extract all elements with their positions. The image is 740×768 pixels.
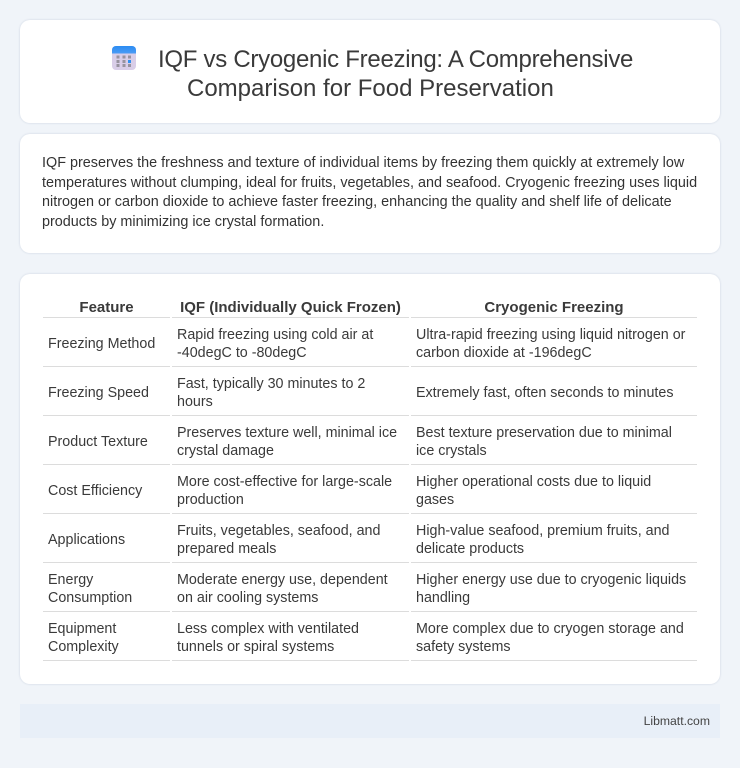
table: production	[177, 492, 244, 508]
table: Preserves texture well, minimal ice	[177, 425, 397, 441]
table: Energy	[48, 572, 93, 588]
intro text	[42, 155, 697, 230]
table: More cost-effective for large-scale	[177, 474, 392, 490]
table: gases	[416, 492, 454, 508]
table	[43, 299, 697, 661]
header panel	[20, 20, 720, 123]
table: Equipment	[48, 621, 116, 637]
table: Product Texture	[48, 434, 148, 450]
table: carbon dioxide at -196degC	[416, 345, 592, 361]
footer text: Libmatt.com: Libmatt.com	[644, 714, 710, 728]
column heading: IQF: IQF (Individually Quick Frozen)	[180, 299, 401, 316]
table: Extremely fast, often seconds to minutes	[416, 385, 673, 401]
intro text: IQF preserves the freshness and texture of individual items by freezing them quickly at extremely low	[42, 155, 684, 171]
row: product texture	[48, 425, 672, 459]
table: hours	[177, 394, 213, 410]
intro panel	[20, 134, 720, 253]
table: High-value seafood, premium fruits, and	[416, 523, 670, 539]
table: delicate products	[416, 541, 524, 557]
table: Best texture preservation due to minimal	[416, 425, 672, 441]
table: Fruits, vegetables, seafood, and	[177, 523, 380, 539]
column heading: feature: Feature	[79, 299, 134, 316]
table: Consumption	[48, 590, 132, 606]
table: Moderate energy use, dependent	[177, 572, 388, 588]
row: freezing speed	[48, 376, 673, 410]
intro text: nitrogen or carbon dioxide to achieve faster freezing, enhancing the quality and shelf life of delicate	[42, 194, 672, 210]
icon: calendar	[112, 46, 136, 70]
row: cost efficiency	[48, 474, 651, 508]
panel: comparison table	[20, 274, 720, 684]
column heading: cryogenic: Cryogenic Freezing	[484, 299, 624, 316]
table: tunnels or spiral systems	[177, 639, 334, 655]
table: Less complex with ventilated	[177, 621, 359, 637]
table: Freezing Speed	[48, 385, 149, 401]
table: ice crystals	[416, 443, 487, 459]
row: freezing method	[48, 327, 686, 361]
table: Rapid freezing using cold air at	[177, 327, 373, 343]
table: More complex due to cryogen storage and	[416, 621, 684, 637]
table: -40degC to -80degC	[177, 345, 307, 361]
table: prepared meals	[177, 541, 276, 557]
table: on air cooling systems	[177, 590, 318, 606]
row: applications	[48, 523, 670, 557]
title: IQF vs Cryogenic Freezing: A Comprehensive	[158, 46, 633, 73]
table: Applications	[48, 532, 125, 548]
intro text: products by minimizing ice crystal formation.	[42, 214, 324, 230]
title: Comparison for Food Preservation	[187, 75, 554, 102]
table: Cost Efficiency	[48, 483, 142, 499]
table: handling	[416, 590, 470, 606]
table: Fast, typically 30 minutes to 2	[177, 376, 365, 392]
table: Complexity	[48, 639, 119, 655]
table: Higher energy use due to cryogenic liquids	[416, 572, 686, 588]
table: Freezing Method	[48, 336, 155, 352]
table: crystal damage	[177, 443, 274, 459]
footer bar	[20, 704, 720, 738]
intro text: temperatures without clumping, ideal for fruits, vegetables, and seafood. Cryogenic freezing uses liquid	[42, 175, 697, 191]
table: Higher operational costs due to liquid	[416, 474, 651, 490]
table: safety systems	[416, 639, 511, 655]
row: energy consumption	[48, 572, 686, 606]
table: Ultra-rapid freezing using liquid nitrogen or	[416, 327, 685, 343]
title	[158, 46, 633, 102]
row: equipment complexity	[48, 621, 684, 655]
